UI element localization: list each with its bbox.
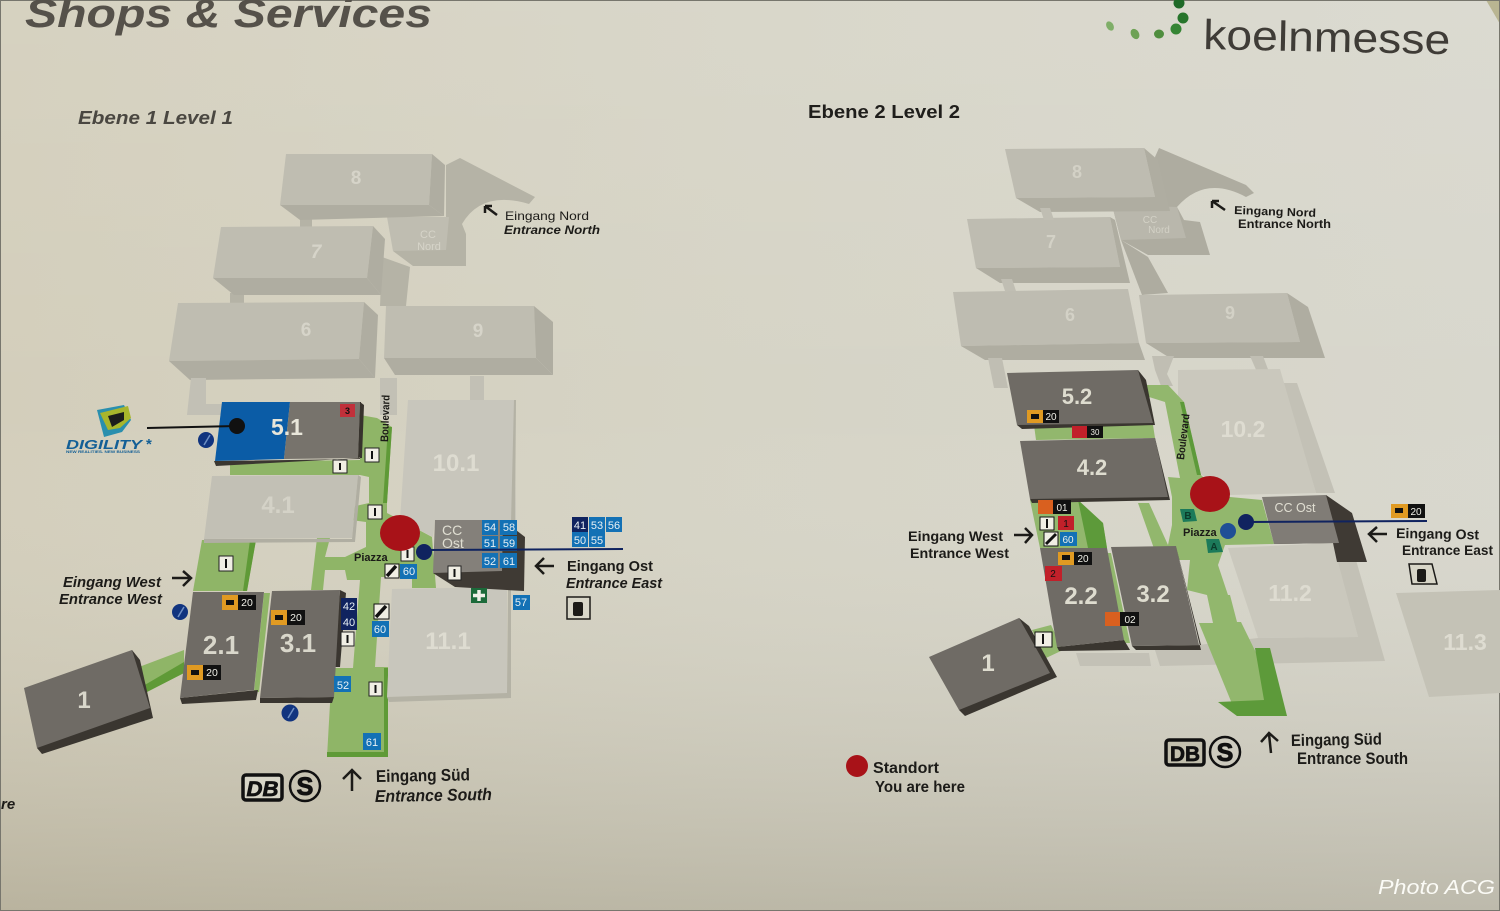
hall 4.2	[1020, 438, 1170, 503]
hall 5.2	[1007, 370, 1155, 429]
blue gate numbers, level 1: 58	[503, 522, 515, 534]
label: entrance east, level 1: Entrance East	[566, 575, 663, 592]
hall 4.2: 4.2	[1077, 455, 1107, 480]
label: Boulevard, level 2: Boulevard	[1175, 413, 1193, 460]
blue gate numbers, level 1: 60	[403, 566, 415, 578]
service badges, level 1: 20	[290, 612, 302, 624]
east line and blue dot, level 2	[1238, 514, 1427, 530]
light halls, level 2: 11.3	[1443, 629, 1487, 655]
label: entrance west, level 1: Entrance West	[59, 591, 163, 608]
legend: you are here: Standort	[873, 760, 940, 777]
icon: DB and S-Bahn, level 2	[1166, 737, 1240, 767]
light halls, level 1: 11.1	[425, 628, 471, 655]
escalator icons, level 1	[374, 564, 399, 619]
blue gate numbers, level 1	[334, 517, 622, 750]
logo: Digility: *	[146, 436, 152, 453]
blue gate numbers, level 1: 52	[337, 680, 349, 692]
label: entrance south, level 1	[343, 765, 492, 806]
inactive halls north, level 2: 7	[1046, 232, 1056, 252]
label: entrance south, level 2	[1261, 730, 1408, 768]
walkways, level 1	[139, 415, 436, 757]
label: entrance west, level 1: Eingang West	[63, 574, 162, 591]
CC Ost: CC	[442, 522, 462, 538]
hall 3.2: 3.2	[1136, 581, 1170, 608]
icon: DB and S-Bahn, level 1: DB	[246, 778, 278, 801]
label: Piazza: Piazza	[354, 552, 389, 564]
label: entrance east, level 2: Eingang Ost	[1396, 525, 1480, 542]
light halls, level 1: 10.1	[433, 450, 479, 477]
light halls, level 2: 10.2	[1221, 416, 1265, 442]
wifi markers, level 1	[172, 432, 298, 722]
hall 1, level 2: 1	[981, 650, 995, 677]
label: entrance west, level 2: Entrance West	[910, 545, 1009, 561]
hall 3.1: 3.1	[280, 628, 316, 658]
logo: koelnmesse	[1104, 0, 1451, 63]
inactive halls north, level 2: 9	[1225, 303, 1235, 323]
label: entrance north, level 1	[485, 206, 600, 237]
blue gate numbers, level 1: 61	[366, 737, 378, 749]
label: entrance east, level 2	[1369, 525, 1493, 558]
logo: Digility	[66, 405, 152, 454]
service badges, level 2: 02	[1124, 615, 1136, 626]
label: entrance east, level 1: Eingang Ost	[567, 558, 653, 575]
legend: you are here	[846, 755, 965, 796]
blue gate numbers, level 1: 54	[484, 522, 496, 534]
logo: Digility: DIGILITY	[66, 437, 144, 452]
hall 1, level 2	[929, 618, 1057, 716]
label: entrance south, level 2: Eingang Süd	[1291, 730, 1382, 750]
inactive halls north, level 2	[953, 148, 1325, 388]
icon: tram, level 1	[567, 597, 590, 619]
icon: DB and S-Bahn, level 2: S	[1217, 739, 1233, 767]
service badges, level 2: 01	[1056, 503, 1068, 514]
label: entrance north, level 1: Entrance North	[504, 223, 600, 237]
inactive halls north, level 2: 8	[1072, 162, 1082, 182]
label: Boulevard: Boulevard	[379, 395, 393, 442]
blue gate numbers, level 1: 42	[343, 601, 355, 613]
label: entrance north, level 2	[1212, 201, 1331, 231]
blue gate numbers, level 1: 40	[343, 617, 355, 629]
service badges, level 2: 1	[1063, 519, 1069, 530]
hall 1: 1	[77, 687, 91, 714]
label: entrance west, level 1	[59, 571, 191, 608]
label: entrance south, level 1: Eingang Süd	[376, 765, 470, 786]
map: level 2	[908, 148, 1500, 768]
inactive halls north, level 2: Nord	[1148, 225, 1170, 236]
info markers, level 1	[219, 448, 461, 696]
photo credit: Photo ACG	[1378, 877, 1495, 899]
hall 2.2: 2.2	[1064, 583, 1098, 610]
you are here marker, level 2	[1190, 476, 1230, 512]
logo: koelnmesse: koelnmesse	[1203, 11, 1451, 63]
service badges, level 1: 20	[241, 597, 253, 609]
hall 2.1	[180, 592, 264, 704]
CC Ost: Ost	[442, 535, 464, 551]
service badges, level 2	[1027, 410, 1425, 626]
hall 2.1: 2.1	[203, 630, 239, 660]
inactive halls north, level 1: 8	[351, 168, 361, 189]
blue gate numbers, level 1: 53	[591, 520, 603, 532]
label: entrance north, level 2: Eingang Nord	[1234, 205, 1316, 220]
gate markers A and B: B	[1184, 511, 1192, 522]
service badges, level 2: 20	[1077, 554, 1089, 565]
map: level 1	[24, 154, 663, 806]
blue gate numbers, level 1: 56	[608, 520, 620, 532]
service badges, level 2: 2	[1050, 569, 1056, 580]
label: entrance south, level 2: Entrance South	[1297, 750, 1408, 768]
inactive halls north, level 1	[169, 154, 553, 415]
hall 1	[24, 650, 153, 754]
first aid icon	[471, 588, 487, 603]
hall 5.2: 5.2	[1062, 384, 1092, 409]
hall 5.1	[214, 402, 364, 466]
label: entrance east, level 2: Entrance East	[1402, 542, 1493, 558]
gate markers A and B	[1180, 509, 1223, 553]
icon: tram, level 2	[1409, 564, 1437, 584]
walkways, level 2	[1030, 385, 1287, 716]
blue gate numbers, level 1: 57	[515, 597, 527, 609]
hall 3.1	[260, 590, 346, 703]
blue gate numbers, level 1: 60	[374, 624, 386, 636]
label: entrance west, level 2	[908, 528, 1032, 561]
service badges, level 2: 60	[1062, 535, 1074, 546]
heading: level 1: Ebene 1 Level 1	[78, 108, 233, 128]
wifi marker, level 2	[1220, 523, 1236, 539]
hall 2.2	[1040, 548, 1130, 651]
blue gate numbers, level 1: 51	[484, 538, 496, 550]
CC Ost, level 2	[1262, 495, 1367, 562]
hall 5.1: 5.1	[271, 414, 303, 440]
logo: Digility: NEW REALITIES. NEW BUSINESS	[66, 449, 140, 454]
inactive halls north, level 1: CC	[420, 229, 436, 241]
inactive halls north, level 1: 6	[301, 320, 311, 341]
light halls, level 2: 11.2	[1268, 580, 1312, 606]
hall 3.2	[1111, 546, 1201, 650]
CC Ost, level 2: CC Ost	[1275, 501, 1316, 515]
cropped text fragment: re	[1, 796, 15, 813]
blue gate numbers, level 1: 52	[484, 556, 496, 568]
label: entrance east, level 1	[536, 558, 663, 592]
label: entrance south, level 1: Entrance South	[375, 785, 492, 806]
light halls, level 1	[204, 400, 516, 702]
inactive halls north, level 2: CC	[1143, 215, 1157, 226]
blue gate numbers, level 1: 41	[574, 520, 586, 532]
service badges, level 1	[187, 595, 305, 680]
icon: DB and S-Bahn, level 2: DB	[1170, 743, 1200, 766]
you are here marker, level 1	[380, 515, 420, 551]
icon: DB and S-Bahn, level 1	[243, 771, 320, 801]
inactive halls north, level 1: 7	[311, 242, 323, 263]
legend: you are here: You are here	[875, 779, 965, 796]
inactive halls north, level 1: 9	[473, 321, 483, 342]
inactive halls north, level 1: Nord	[417, 241, 441, 253]
icon: DB and S-Bahn, level 1: S	[297, 773, 313, 801]
CC Ost	[433, 520, 525, 591]
light halls, level 2	[1076, 369, 1500, 697]
gate markers A and B: A	[1210, 542, 1218, 553]
service badges, level 2: 20	[1045, 412, 1057, 423]
blue gate numbers, level 1: 55	[591, 535, 603, 547]
blue gate numbers, level 1: 50	[574, 535, 586, 547]
label: entrance north, level 1: Eingang Nord	[505, 209, 589, 223]
service badges, level 2: 30	[1091, 428, 1100, 437]
label: entrance west, level 2: Eingang West	[908, 528, 1003, 544]
label: entrance north, level 2: Entrance North	[1238, 219, 1331, 231]
service badges, level 2: 20	[1410, 507, 1422, 518]
light halls, level 1: 4.1	[261, 492, 295, 519]
label: Piazza, level 2: Piazza	[1183, 527, 1218, 539]
hall 5.1: 3	[345, 406, 350, 416]
service badges, level 1: 20	[206, 667, 218, 679]
heading: level 2: Ebene 2 Level 2	[808, 102, 960, 122]
blue gate numbers, level 1: 61	[503, 556, 515, 568]
pointer to 5.1	[147, 418, 245, 434]
east line and blue dot, level 1	[416, 544, 623, 560]
info marker, level 2	[1035, 632, 1052, 647]
inactive halls north, level 2: 6	[1065, 305, 1075, 325]
blue gate numbers, level 1: 59	[503, 538, 515, 550]
